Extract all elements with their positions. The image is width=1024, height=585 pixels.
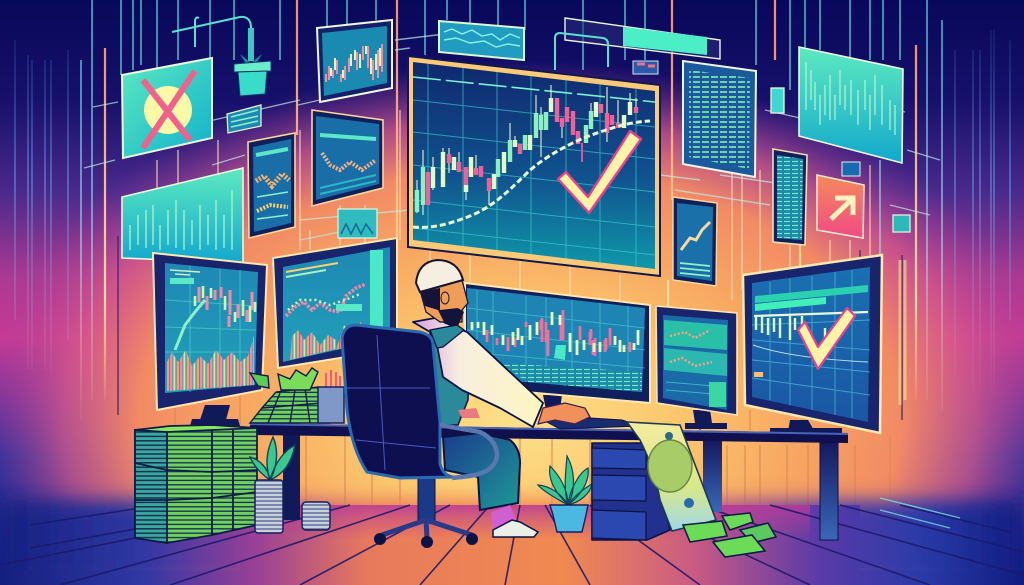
shirt and sleeve — [413, 318, 543, 427]
monitor: centre wide — [465, 283, 650, 410]
panel: left teal area chart — [122, 168, 243, 263]
candlesticks — [417, 85, 636, 215]
far hand — [458, 408, 480, 418]
trousers — [443, 433, 520, 510]
vest strap — [430, 325, 464, 348]
panel: teal top band — [555, 18, 720, 74]
panel: top centre line chart — [439, 21, 524, 60]
dollar bill — [627, 422, 716, 531]
panel: tall left chart — [248, 133, 295, 238]
neck and face — [420, 280, 468, 322]
panel: middle left chart — [312, 110, 383, 206]
panel: small mini chart — [338, 209, 377, 238]
check mark — [558, 131, 641, 213]
small blue tag — [842, 162, 860, 176]
keyboard — [545, 418, 640, 429]
panel: top small chart — [317, 20, 392, 102]
small teal tag right — [893, 215, 910, 232]
panel: small side chart — [673, 197, 717, 286]
monitor: centre left — [273, 238, 397, 368]
armrest — [440, 425, 497, 478]
small square tag — [771, 88, 784, 113]
office chair — [342, 325, 497, 548]
panel: spreadsheet — [683, 61, 756, 177]
panel: large main chart with check mark — [408, 56, 660, 276]
filing cabinet — [592, 443, 670, 540]
loose cash on floor — [683, 513, 776, 557]
panel: upper right teal chart — [799, 47, 903, 163]
chair back — [342, 325, 453, 478]
cash stack: large floor stack — [135, 425, 257, 543]
panel: small blue note — [227, 105, 261, 133]
panel: narrow vertical table — [773, 149, 807, 245]
trader figure — [413, 260, 590, 537]
vest — [430, 325, 470, 425]
cap — [416, 260, 463, 292]
monitor: far left — [153, 253, 267, 426]
pen holder — [318, 370, 344, 423]
hand — [538, 403, 590, 424]
potted plant in can — [250, 437, 295, 533]
monitor: right small — [656, 306, 737, 429]
cash stack: on desk — [250, 368, 330, 423]
stack of coins — [302, 502, 330, 530]
small floor plant — [538, 456, 592, 532]
floor — [0, 498, 1024, 585]
monitor: far right with check mark — [743, 255, 882, 435]
hair and beard — [421, 288, 464, 326]
panel: crossed-out sign — [122, 58, 212, 158]
icon: orange up arrow sign — [817, 175, 864, 238]
dashed trend line — [413, 121, 650, 227]
chair base — [374, 478, 478, 548]
sock and shoe — [491, 505, 516, 530]
icon: hanging plant pot — [172, 17, 271, 96]
ear — [441, 292, 449, 304]
desk — [250, 423, 848, 540]
